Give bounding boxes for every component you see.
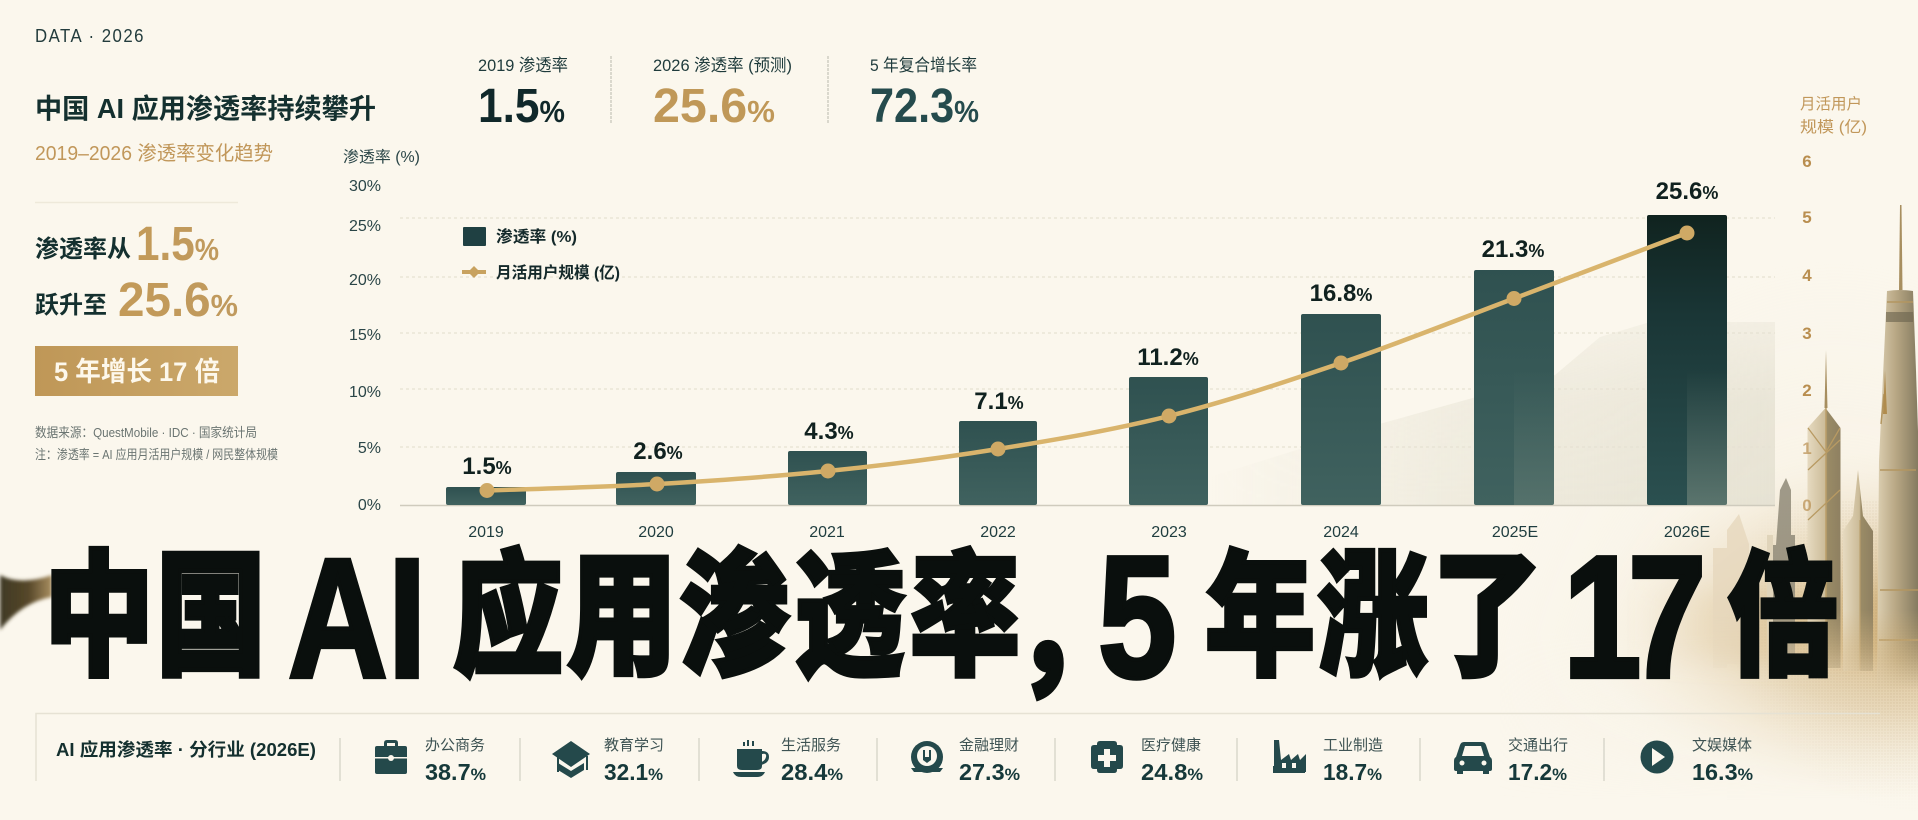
sector heading: AI 应用渗透率 · 分行业 (2026E)	[56, 739, 316, 760]
main title: 率	[910, 542, 1020, 694]
faint distant towers	[1713, 514, 1749, 634]
sector: life services: 28.4%	[781, 759, 843, 785]
main title: ，	[1013, 550, 1128, 708]
kpi: 2026: 2026 渗透率 (预测)	[653, 56, 792, 75]
sector: healthcare: 24.8%	[1141, 759, 1203, 785]
x axis years: 2022	[980, 524, 1016, 541]
value labels: 25.6%	[1656, 178, 1718, 205]
left axis: 渗透率 (%)	[343, 148, 420, 166]
legend: 月活用户规模 (亿)	[496, 263, 620, 282]
legend	[462, 227, 620, 282]
sector: education	[552, 737, 664, 785]
right axis: 6	[1802, 152, 1812, 171]
sector: office: 办公商务	[425, 737, 485, 754]
value labels: 11.2%	[1137, 344, 1199, 371]
panel: sector breakdown	[36, 714, 1880, 785]
right axis: 规模 (亿)	[1800, 118, 1867, 136]
main title: 中	[44, 542, 154, 694]
left axis: 20%	[349, 272, 381, 289]
value labels	[462, 178, 1718, 480]
main title: 7	[1628, 520, 1706, 714]
value labels: 7.1%	[974, 388, 1024, 415]
sector: education: 教育学习	[604, 737, 664, 754]
icon: briefcase	[375, 740, 407, 774]
chart background shading	[1381, 322, 1775, 505]
source note: 数据来源：QuestMobile · IDC · 国家统计局	[35, 425, 257, 440]
left axis: 15%	[349, 327, 381, 344]
right axis: 月活用户	[1800, 95, 1862, 113]
bank tower	[1808, 350, 1840, 668]
source note: 注：渗透率 = AI 应用月活用户规模 / 网民整体规模	[35, 447, 278, 462]
eyebrow: DATA · 2026	[35, 26, 145, 46]
icon: car	[1454, 742, 1492, 774]
icon: graduation cap	[552, 741, 590, 778]
kpi: cagr: 5 年复合增长率	[870, 56, 977, 75]
x axis years	[468, 524, 1710, 541]
main title: 用	[567, 542, 677, 694]
x axis years: 2024	[1323, 524, 1359, 541]
value labels: 21.3%	[1482, 236, 1544, 263]
sector: industry: 工业制造	[1323, 737, 1383, 754]
x axis years: 2020	[638, 524, 674, 541]
main title: 涨	[1318, 542, 1428, 694]
right axis	[1800, 95, 1867, 515]
value labels: 1.5%	[462, 453, 512, 480]
main title: 年	[1205, 542, 1315, 694]
brush stroke	[0, 575, 52, 630]
main title: I	[388, 523, 426, 713]
value labels: 2.6%	[633, 438, 683, 465]
right axis: 1	[1802, 439, 1812, 458]
sector: entertainment: 文娱媒体	[1692, 737, 1752, 754]
left axis: 30%	[349, 178, 381, 195]
left axis: 10%	[349, 384, 381, 401]
x axis years: 2025E	[1492, 524, 1538, 541]
kpi: 2019	[478, 56, 568, 133]
sector: education: 32.1%	[604, 759, 663, 785]
source note	[35, 425, 278, 462]
icon: coffee cup	[733, 740, 769, 777]
icon: play button	[1640, 740, 1674, 774]
kpi: 2026: 25.6%	[653, 80, 775, 133]
right axis: 3	[1802, 324, 1812, 343]
mid tower	[1843, 470, 1873, 671]
kpi: cagr	[870, 56, 979, 133]
main title: 应	[453, 542, 563, 694]
sector: finance	[911, 737, 1020, 785]
background: skyline haze	[1617, 461, 1918, 794]
right axis: 0	[1802, 496, 1812, 515]
value labels: 16.8%	[1310, 280, 1372, 307]
icon: coin	[911, 741, 943, 773]
sector: office: 38.7%	[425, 759, 486, 785]
headline callout: 跃升至	[35, 292, 107, 319]
main title: 了	[1432, 542, 1542, 694]
main title: 5	[1098, 520, 1176, 714]
sector: entertainment	[1640, 737, 1753, 785]
small grey tower	[1767, 478, 1795, 665]
main title	[44, 520, 1838, 714]
headline callout: 1.5%	[136, 218, 219, 271]
sector: healthcare: 医疗健康	[1141, 737, 1201, 754]
skyline illustration	[1713, 205, 1918, 691]
main title: 渗	[680, 542, 790, 694]
subtitle: 2019–2026 渗透率变化趋势	[35, 142, 273, 165]
main title: 倍	[1728, 542, 1838, 694]
left axis: 0%	[358, 497, 381, 514]
right axis: 5	[1802, 208, 1812, 227]
right axis: 2	[1802, 381, 1812, 400]
main title: 透	[795, 542, 905, 694]
legend: 渗透率 (%)	[496, 227, 577, 246]
shanghai tower	[1877, 205, 1918, 691]
kpi: cagr: 72.3%	[870, 80, 979, 133]
right axis: 4	[1802, 266, 1812, 285]
bars	[446, 215, 1727, 505]
headline callout	[35, 202, 238, 327]
left axis	[343, 148, 420, 514]
line: MAU	[480, 226, 1694, 498]
sector: industry	[1273, 737, 1383, 785]
heading: 中国 AI 应用渗透率持续攀升	[35, 93, 376, 124]
sector: entertainment: 16.3%	[1692, 759, 1753, 785]
sector: finance: 27.3%	[959, 759, 1020, 785]
sector: office	[375, 737, 486, 785]
x axis years: 2021	[809, 524, 845, 541]
main title: 1	[1563, 520, 1641, 714]
left axis: 25%	[349, 218, 381, 235]
left axis: 5%	[358, 440, 381, 457]
kpi: 2019: 2019 渗透率	[478, 56, 568, 75]
sector: healthcare	[1091, 737, 1203, 785]
sector: life services	[733, 737, 843, 785]
x axis years: 2019	[468, 524, 504, 541]
kpi: 2019: 1.5%	[478, 80, 565, 133]
value labels: 4.3%	[804, 418, 854, 445]
icon: factory	[1273, 740, 1306, 773]
icon: medical cross	[1091, 741, 1123, 773]
headline callout: 25.6%	[118, 274, 238, 327]
sector: transport: 17.2%	[1508, 759, 1567, 785]
sector: transport	[1454, 736, 1568, 785]
kpi: 2026	[653, 56, 792, 133]
main title: 国	[156, 542, 266, 694]
main title: A	[288, 523, 388, 713]
sector: life services: 生活服务	[781, 737, 841, 754]
sector: transport: 交通出行	[1508, 736, 1568, 754]
headline callout: 渗透率从	[35, 235, 131, 263]
sector: industry: 18.7%	[1323, 759, 1382, 785]
sector: finance: 金融理财	[959, 737, 1019, 754]
badge: 5 year growth	[35, 346, 238, 396]
x axis years: 2026E	[1664, 524, 1710, 541]
x axis years: 2023	[1151, 524, 1187, 541]
chart: penetration bars and MAU line	[343, 95, 1867, 541]
badge: 5 year growth: 5 年增长 17 倍	[54, 357, 220, 387]
